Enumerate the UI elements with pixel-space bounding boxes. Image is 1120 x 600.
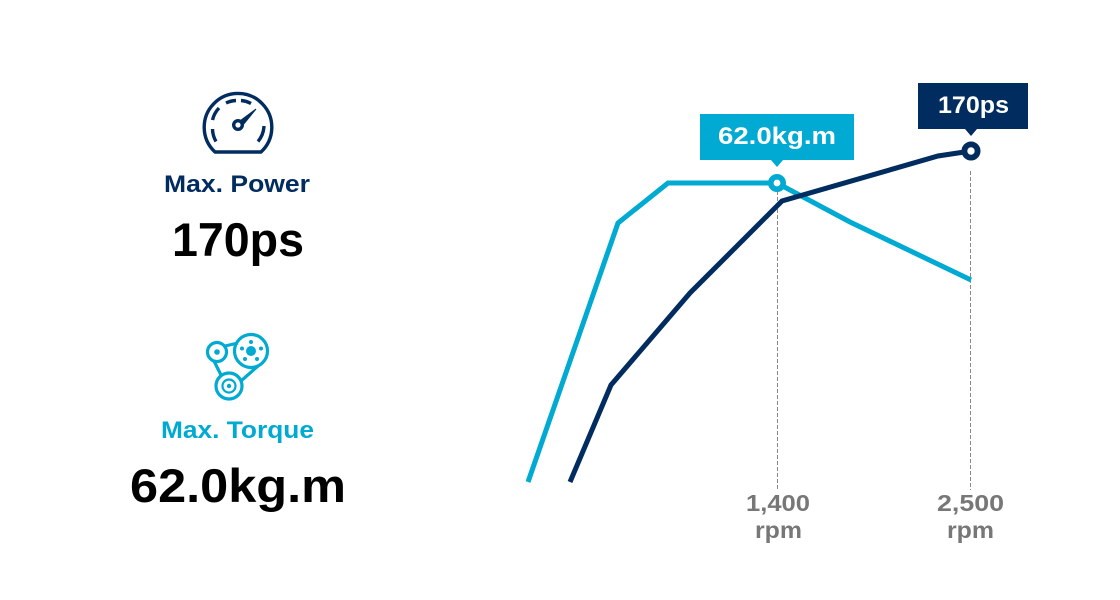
callout: 170ps	[918, 83, 1028, 136]
line: power curve	[570, 151, 971, 482]
icon: belt pulleys	[208, 334, 268, 399]
value: 62.0kg.m: 62.0kg.m	[130, 459, 346, 512]
dashed guide: 2,500 rpm	[970, 171, 972, 490]
callout: 62.0kg.m	[700, 114, 854, 167]
value: 170ps: 170ps	[172, 213, 304, 266]
callout: 62.0kg.m: 62.0kg.m	[718, 123, 836, 150]
axis label: 2,500 rpm	[937, 490, 1004, 543]
line: torque curve	[528, 183, 971, 482]
marker: torque peak	[771, 177, 783, 189]
axis label: 2,500 rpm: 2,500	[937, 490, 1004, 516]
marker: power peak	[964, 144, 978, 158]
dashed guide: 1,400 rpm	[776, 191, 778, 490]
axis label: 1,400 rpm	[746, 490, 810, 543]
axis label: 1,400 rpm: rpm	[755, 517, 802, 543]
callout: 170ps: 170ps	[938, 92, 1009, 119]
axis label: 2,500 rpm: rpm	[947, 517, 994, 543]
icon: speedometer	[204, 93, 272, 152]
axis label: 1,400 rpm: 1,400	[746, 490, 810, 516]
label: Max. Torque: Max. Torque	[161, 417, 314, 444]
label: Max. Power: Max. Power	[164, 171, 310, 198]
